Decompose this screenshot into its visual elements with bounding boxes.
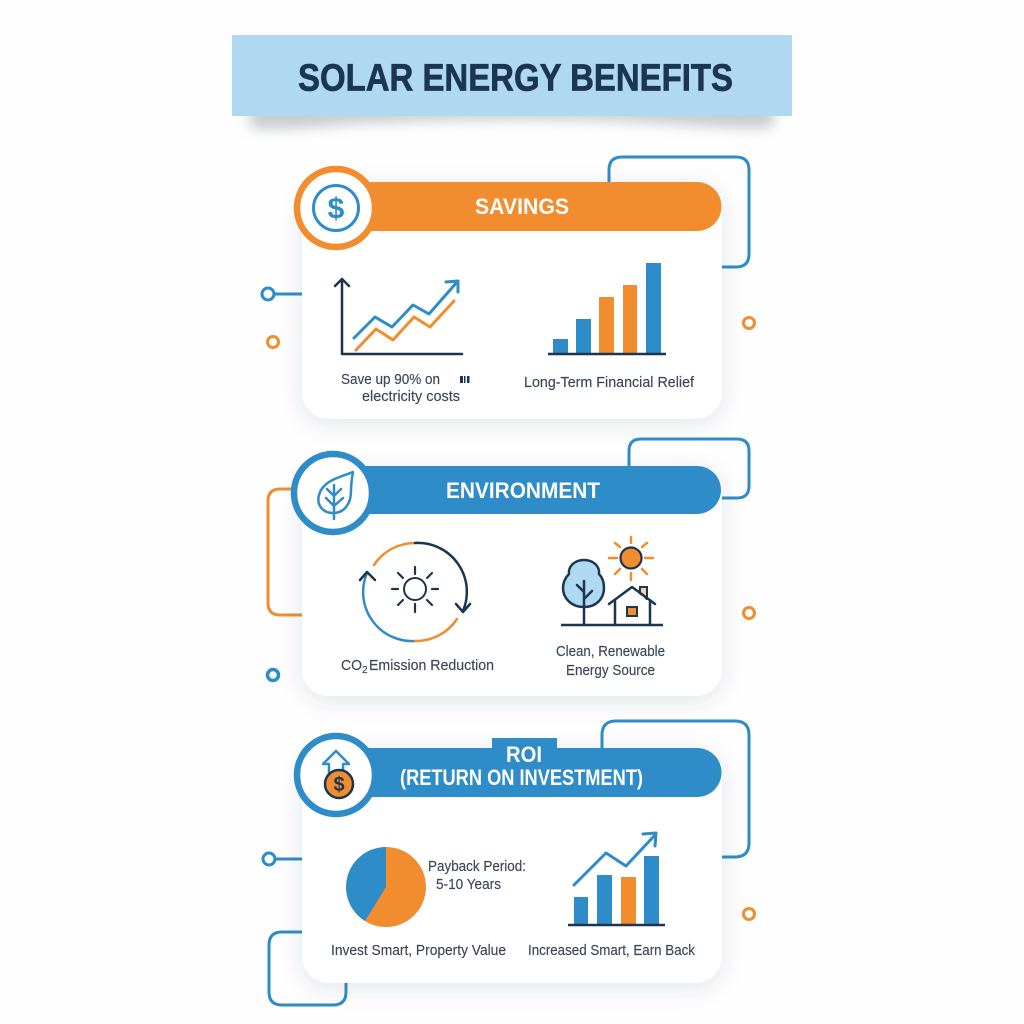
text: clean renewable: Clean, Renewable	[556, 643, 665, 660]
text: payback period: Payback Period:	[428, 858, 526, 875]
decorative node: orange right	[744, 908, 754, 920]
decorative node: orange right	[744, 318, 754, 328]
text: co2 emission reduction: CO	[341, 657, 362, 674]
icon: leaf badge	[294, 454, 372, 532]
savings header bar	[345, 182, 722, 231]
icon: coin and arrow badge: $	[333, 774, 345, 796]
title banner	[232, 35, 792, 129]
text: energy source: Energy Source	[566, 662, 655, 679]
text: co2 emission reduction: Emission Reduction	[369, 657, 494, 674]
text: co2 emission reduction: 2	[362, 665, 368, 676]
roi heading: ROI	[506, 742, 542, 767]
line chart: savings trend	[335, 279, 462, 354]
connector: environment top right frame	[629, 439, 749, 498]
connector: roi left node	[263, 853, 302, 865]
connector: environment left orange frame	[268, 489, 302, 615]
icon: tree, house and sun	[561, 537, 663, 625]
panel: roi	[297, 736, 722, 983]
icon: emission cycle	[360, 543, 470, 641]
roi subheading: (RETURN ON INVESTMENT)	[400, 765, 643, 790]
connector: roi bottom left frame	[269, 932, 346, 1005]
text: increased smart: Increased Smart, Earn Back	[528, 942, 695, 959]
bar chart: growth with arrow	[568, 833, 665, 925]
pie chart: payback	[346, 847, 426, 927]
bar chart: financial relief	[548, 263, 666, 354]
icon: dollar badge	[297, 169, 375, 247]
text: invest smart: Invest Smart, Property Value	[331, 942, 506, 959]
panel: savings	[297, 169, 722, 419]
title text: SOLAR ENERGY BENEFITS	[298, 58, 733, 100]
connector: roi top right frame	[602, 721, 749, 857]
icon: dollar badge: $	[328, 192, 345, 226]
decorative node: orange right	[744, 608, 754, 618]
connector: savings left node	[262, 288, 302, 300]
text: save up: Save up 90% on	[341, 371, 440, 388]
environment header bar	[345, 466, 721, 514]
icon: coin and arrow badge	[297, 736, 375, 814]
panel: environment	[294, 454, 722, 696]
text: electricity costs: electricity costs	[362, 388, 460, 405]
text: payback years: 5-10 Years	[436, 876, 501, 893]
savings heading: SAVINGS	[475, 194, 569, 219]
decorative node: orange left	[268, 336, 278, 348]
environment heading: ENVIRONMENT	[446, 478, 601, 503]
text: long-term financial relief: Long-Term Financial Relief	[524, 374, 695, 391]
decorative node: blue left	[268, 670, 278, 680]
connector: savings top right frame	[609, 157, 749, 267]
small mark	[460, 376, 470, 383]
roi header bar	[345, 738, 722, 797]
